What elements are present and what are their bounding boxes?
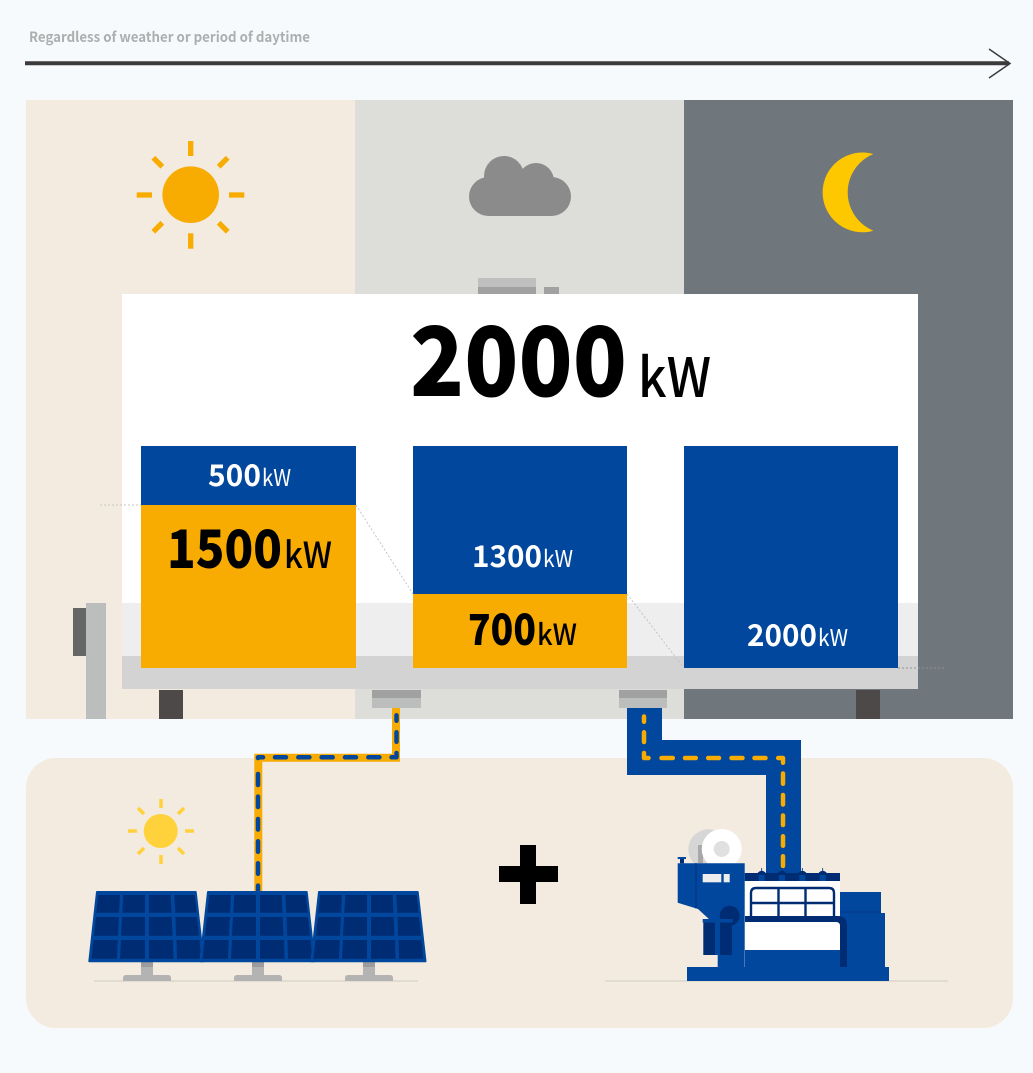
generator top bar and cylinders — [745, 868, 840, 881]
bar: sunny, 500 kW and 1500 kW: kW — [262, 459, 291, 493]
icon: small sun — [128, 799, 194, 864]
solar power cable — [258, 708, 396, 892]
ground line: solar — [94, 980, 418, 982]
generator base and boxes — [687, 892, 889, 981]
bar: sunny, 500 kW and 1500 kW: 1500 — [167, 508, 282, 584]
bar: cloudy, 1300 kW and 700 kW — [413, 446, 627, 668]
panel: power sources — [26, 758, 1013, 1028]
flywheels — [688, 829, 742, 869]
engine window with rail — [745, 881, 847, 967]
bar: cloudy, 1300 kW and 700 kW: 1300 — [472, 532, 542, 576]
bar: night, 2000 kW: kW — [818, 619, 848, 653]
dotted guide lines — [100, 505, 945, 668]
generator power duct — [627, 708, 801, 875]
ground line: generator — [605, 980, 948, 982]
support legs — [159, 690, 880, 719]
side post — [73, 603, 106, 719]
icon: cloud — [469, 156, 571, 216]
icon: plus sign — [499, 845, 558, 904]
bar: cloudy, 1300 kW and 700 kW: kW — [543, 540, 573, 574]
panel: night background — [684, 100, 1013, 719]
icon: moon — [823, 152, 874, 232]
timeline heading: Regardless of weather or period of daytime — [29, 27, 310, 47]
building chimney — [478, 278, 559, 294]
bar: cloudy, 1300 kW and 700 kW: kW — [537, 612, 577, 654]
icon: solar panels — [89, 892, 426, 961]
generator intake — [703, 906, 740, 955]
timeline arrow — [25, 49, 1010, 78]
panel: power output board — [122, 294, 918, 689]
bar: night, 2000 kW — [684, 446, 898, 668]
bar: sunny, 500 kW and 1500 kW: kW — [284, 527, 332, 579]
bar: sunny, 500 kW and 1500 kW: 500 — [208, 451, 261, 495]
bar: night, 2000 kW: 2000 — [747, 611, 817, 655]
icon: generator — [678, 829, 889, 981]
total output value: 2000 — [410, 285, 627, 424]
panel: sunny day background — [26, 100, 355, 719]
total output value: kW — [638, 334, 711, 413]
icon: sun — [137, 141, 244, 249]
bar: sunny, 500 kW and 1500 kW — [141, 446, 356, 668]
panel: cloudy background — [355, 100, 684, 719]
bar: cloudy, 1300 kW and 700 kW: 700 — [468, 596, 536, 658]
generator housing — [678, 857, 745, 967]
connectors under board — [372, 690, 667, 708]
solar stands — [123, 962, 393, 981]
